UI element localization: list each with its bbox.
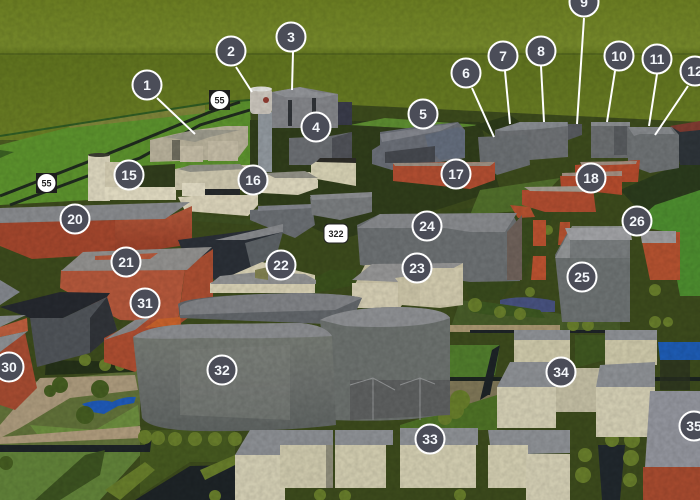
- marker 8: [526, 36, 556, 66]
- marker 23: 23: [409, 260, 425, 276]
- marker 22: 22: [273, 257, 289, 273]
- leader lines: [157, 18, 688, 137]
- marker 25: [568, 262, 596, 292]
- marker 24: [412, 212, 442, 240]
- highway shield 55 upper: [209, 90, 230, 110]
- marker 34: [546, 358, 576, 386]
- highway shield 55 lower: [36, 173, 57, 193]
- marker 32: [208, 356, 236, 384]
- building 6: grey block: [478, 135, 530, 175]
- building 18: red blocks: [510, 160, 640, 280]
- marker 7: [488, 42, 518, 70]
- marker 3: [276, 22, 306, 52]
- marker 16: [238, 166, 268, 194]
- marker 4: [302, 112, 330, 142]
- building 24: grey glass block: [357, 213, 522, 282]
- marker 31: 31: [137, 295, 153, 311]
- building 33: cream blocks: [235, 428, 570, 500]
- marker 32: 32: [214, 362, 230, 378]
- marker 24: 24: [419, 218, 435, 234]
- marker 4: 4: [312, 119, 320, 135]
- building 5: grey-blue block: [372, 122, 465, 170]
- building 4: grey block: [289, 132, 352, 165]
- building 4b: cream block: [311, 158, 356, 186]
- building 32 right: glass wing: [320, 307, 450, 421]
- building 3: grey towers: [272, 87, 352, 128]
- building 17: red block: [393, 162, 495, 189]
- marker 30: 30: [1, 359, 17, 375]
- marker 2: 2: [227, 43, 235, 59]
- marker 8: 8: [537, 43, 545, 59]
- highway shield 322: [324, 224, 348, 243]
- building 31b: red lower wing: [104, 317, 181, 372]
- marker 17: [442, 160, 470, 188]
- building 2: water tower: [250, 86, 272, 172]
- marker 18: 18: [583, 170, 599, 186]
- dark building behind 22: [178, 224, 283, 280]
- building 20: red block: [0, 202, 192, 259]
- building 22: cream block: [210, 262, 316, 293]
- grey mid blocks: [250, 192, 372, 238]
- marker 25: 25: [574, 269, 590, 285]
- building 16: cream blocks: [175, 164, 318, 216]
- marker 12: [680, 56, 700, 86]
- marker 7: 7: [499, 48, 507, 64]
- building 1: beige residence: [150, 126, 248, 162]
- building 26: red block: [565, 228, 680, 280]
- marker 16: 16: [245, 172, 261, 188]
- highway shield 55 upper: 55: [214, 96, 225, 106]
- marker 11: 11: [650, 51, 665, 67]
- building 34: cream blocks: [497, 330, 657, 437]
- ground: campus base: [0, 100, 700, 500]
- marker 6: 6: [462, 65, 470, 81]
- marker 11: [642, 44, 672, 74]
- marker 1: 1: [143, 77, 151, 93]
- marker 21: 21: [118, 254, 134, 270]
- marker 30: [0, 352, 24, 382]
- building 30: red block: [0, 315, 37, 410]
- marker 3: 3: [287, 29, 295, 45]
- building 35: grey roof and red wall: [643, 391, 700, 500]
- background: farm fields: [0, 0, 700, 140]
- ponds: [82, 297, 700, 414]
- marker 1: [132, 70, 162, 100]
- marker 23: [402, 254, 432, 282]
- marker 33: [416, 424, 444, 454]
- marker 20: 20: [67, 211, 83, 227]
- marker 26: 26: [629, 213, 645, 229]
- highway 55: [0, 102, 250, 205]
- marker 5: [408, 100, 438, 128]
- building 10: grey block: [591, 122, 630, 158]
- roads: [0, 330, 700, 500]
- building 32 front: glass hall: [133, 323, 336, 431]
- marker 34: 34: [553, 364, 569, 380]
- marker 15: [114, 160, 144, 190]
- marker 21: [112, 248, 140, 276]
- marker 33: 33: [422, 431, 438, 447]
- marker 15: 15: [121, 167, 137, 183]
- building 11 and 12: grey block: [628, 127, 679, 173]
- building 32 back: curved grey hall: [178, 293, 362, 325]
- highway shield 322: 322: [328, 229, 344, 239]
- marker 18: [576, 164, 606, 192]
- far right dark building: [670, 121, 700, 165]
- marker 10: 10: [611, 48, 627, 64]
- marker 17: 17: [448, 166, 464, 182]
- building 25: grey glass tower: [555, 226, 630, 322]
- marker 22: [266, 250, 296, 280]
- building 21: red block: [60, 247, 213, 325]
- building 31: dark block: [0, 280, 117, 367]
- marker 35: [680, 412, 700, 440]
- marker 31: [130, 288, 160, 318]
- marker 26: [622, 206, 652, 236]
- marker 5: 5: [419, 106, 427, 122]
- marker 2: [216, 36, 246, 66]
- marker 20: [60, 204, 90, 234]
- highway shield 55 lower: 55: [41, 178, 52, 188]
- marker 10: [604, 42, 634, 70]
- building 7 and 8: grey blocks: [495, 122, 582, 165]
- landscaping trees: [0, 115, 673, 500]
- marker 9: [570, 0, 598, 16]
- building 23: cream block: [352, 263, 463, 308]
- marker 6: [452, 58, 480, 88]
- building 15: cream tower and block: [88, 153, 176, 201]
